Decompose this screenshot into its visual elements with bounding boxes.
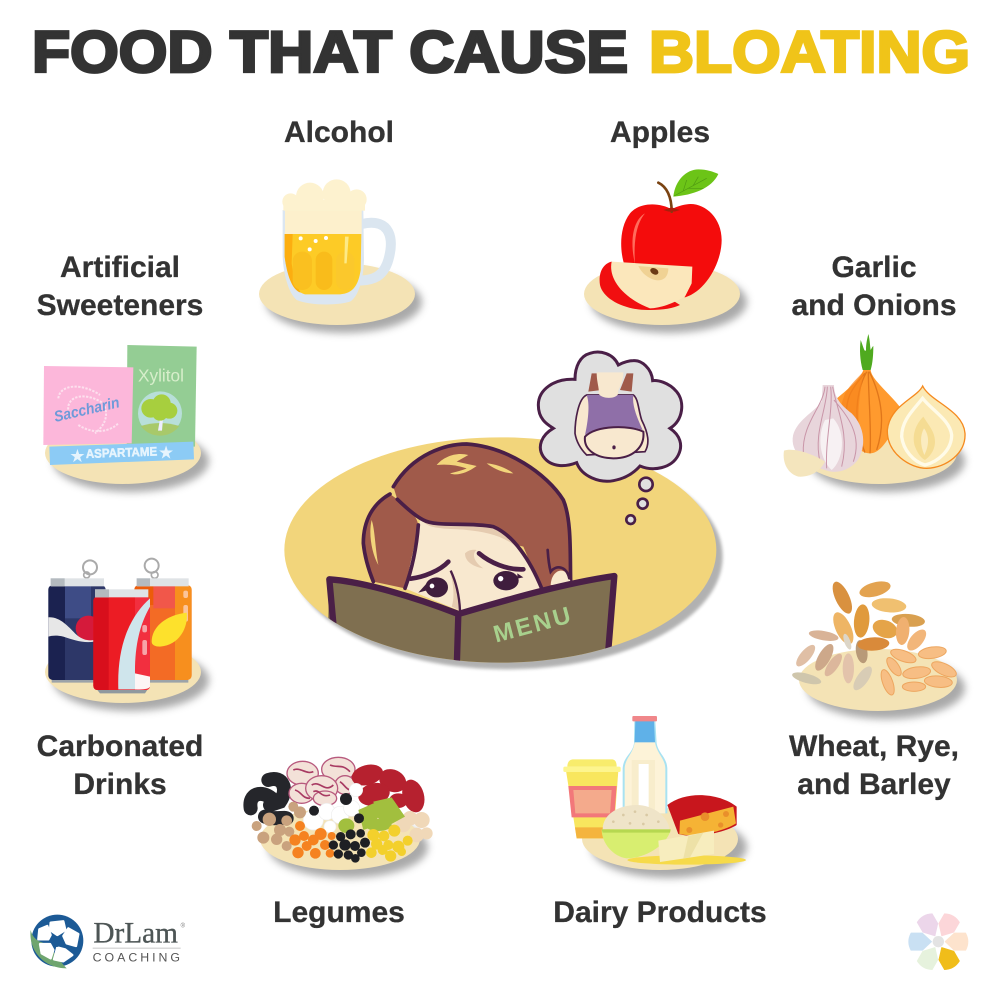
yellow peas: [366, 825, 413, 862]
panel: dairy products: [553, 716, 767, 929]
plate: [45, 641, 209, 711]
icon: sweetener packets: Saccharin: [52, 394, 121, 426]
icon: apple: [600, 169, 722, 310]
heading: Wheat, Rye, and Barley: Wheat, Rye,: [789, 730, 959, 763]
cream beans: [396, 811, 433, 842]
heading: Wheat, Rye, and Barley: and Barley: [797, 768, 951, 801]
yogurt cup: [563, 759, 621, 838]
icon: sweetener packets: ★: [69, 446, 85, 466]
plate: [801, 422, 965, 492]
face: [405, 520, 542, 612]
icon: sweetener packets: [43, 345, 197, 466]
garlic bulb: [793, 385, 863, 472]
heading: Artificial Sweeteners: Sweeteners: [37, 289, 203, 322]
green peas: [338, 797, 405, 833]
onion: whole: [836, 334, 902, 453]
oval background: [284, 437, 723, 669]
logo mark: [30, 915, 83, 968]
white beans: [303, 783, 363, 833]
panel: legumes: [250, 757, 433, 929]
onion: half: [887, 386, 965, 468]
nose line: [451, 571, 460, 611]
icon: grains: [791, 578, 958, 697]
eye left: [418, 577, 448, 597]
heading: Carbonated Drinks: Drinks: [73, 768, 167, 801]
menu: [327, 576, 614, 673]
butter block: [658, 831, 714, 862]
left hair outline: [363, 494, 390, 582]
title: [32, 20, 970, 85]
title: BLOATING: [649, 20, 970, 85]
hair outline front: [397, 499, 542, 588]
logo: DrLam Coaching: [30, 915, 186, 968]
menu: MENU: [491, 602, 575, 648]
milk bottle: [623, 716, 667, 813]
brow left: [411, 562, 448, 579]
panel: apples: [584, 116, 747, 333]
thought: arms: [575, 395, 648, 455]
logo tagline: COACHING: [93, 951, 180, 965]
panel: carbonated drinks: [37, 559, 209, 801]
plate: [799, 649, 965, 719]
central illustration: woman reading menu: [284, 352, 723, 673]
icon: sweetener packets: ★: [158, 443, 174, 463]
thought: hair: [588, 373, 633, 392]
left hair: [363, 494, 418, 588]
can: blue: [48, 560, 106, 683]
thought bubble: [538, 352, 682, 524]
plate: [45, 422, 209, 492]
thought: navel: [612, 445, 616, 449]
thought: tank top: [585, 395, 643, 435]
orange lentils: [289, 821, 336, 859]
pinto beans: [287, 757, 355, 806]
thought: belly: [585, 427, 643, 458]
heading: Alcohol: Alcohol: [284, 116, 394, 149]
pinto markings: [293, 765, 350, 798]
hair highlights: [370, 454, 513, 565]
plate: butter dish: [627, 855, 746, 865]
registered mark: ®: [181, 922, 186, 929]
icon: garlic and onions: [784, 334, 965, 477]
garlic clove: [784, 450, 825, 477]
logo divider: [93, 948, 181, 949]
face shadow: [423, 522, 520, 611]
eye right: [493, 571, 523, 590]
heading: Garlic and Onions: Garlic: [831, 251, 917, 284]
panel: artificial sweeteners: [37, 251, 209, 492]
panel: alcohol: [259, 116, 422, 333]
heading: Apples: Apples: [610, 116, 710, 149]
title: FOOD THAT CAUSE: [32, 20, 628, 85]
heading: Artificial Sweeteners: Artificial: [60, 251, 180, 284]
brow right: [479, 553, 523, 569]
thought circles: [626, 478, 653, 524]
icon: sweetener packets: Xylitol: [138, 366, 184, 386]
small black beans: [309, 793, 370, 863]
plate: [260, 808, 428, 878]
black beans: [250, 779, 287, 818]
heading: Wheat, Rye, and Barley: [789, 730, 959, 801]
heading: Garlic and Onions: [792, 251, 956, 322]
panel: garlic and onions: [784, 251, 965, 492]
plate: [582, 808, 747, 878]
plate: [584, 263, 747, 333]
icon: soda cans: [48, 559, 192, 693]
cheese wheel: [667, 795, 737, 836]
hair top outline: [393, 444, 571, 583]
heading: Garlic and Onions: and Onions: [792, 289, 956, 322]
red kidney beans: [349, 761, 428, 815]
panel: wheat, rye, and barley: [789, 578, 965, 801]
ear outline: [548, 550, 569, 578]
rice bowl: [602, 805, 671, 858]
heading: Carbonated Drinks: [37, 730, 203, 801]
icon: dairy: [563, 716, 746, 865]
ear: [551, 571, 571, 585]
can: orange: [134, 559, 192, 683]
woman head: [363, 444, 571, 612]
icon: legumes: [250, 757, 433, 863]
icon: beer mug: [282, 179, 391, 304]
heading: Carbonated Drinks: Carbonated: [37, 730, 203, 763]
plate: [259, 263, 422, 333]
heading: Dairy Products: Dairy Products: [553, 896, 767, 929]
tan beans: [252, 802, 306, 851]
thought: neck: [597, 372, 623, 398]
heading: Artificial Sweeteners: [37, 251, 203, 322]
heading: Legumes: Legumes: [273, 896, 405, 929]
can: red: [93, 589, 150, 693]
icon: pastel flower: [909, 912, 968, 972]
logo wordmark: DrLam: [93, 918, 178, 950]
back hair: [393, 444, 571, 590]
icon: sweetener packets: ASPARTAME: [86, 445, 157, 461]
